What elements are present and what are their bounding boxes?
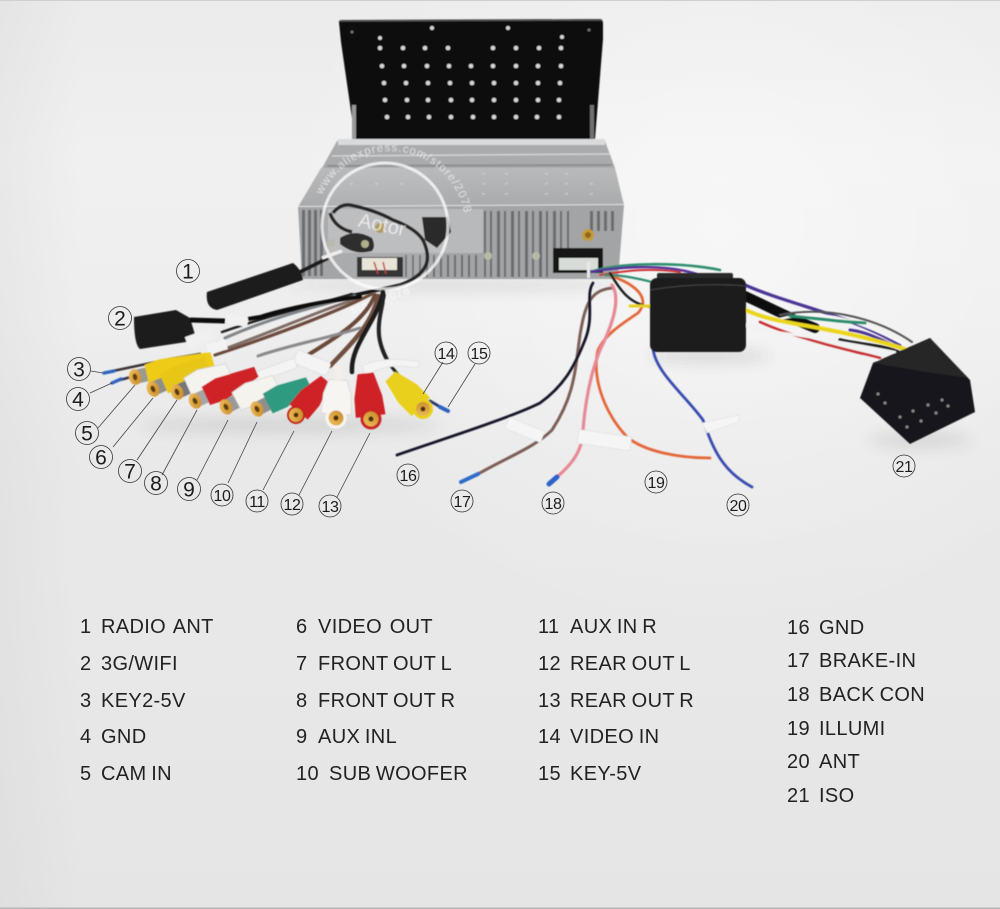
number 3: 3 [73,358,85,382]
photo: car stereo and harness [102,18,976,490]
RCA connector 10: green [246,372,314,422]
left harness wires [104,292,448,411]
number 6 [90,446,112,470]
callout leader lines [90,362,475,497]
legend item 12: 12 [538,653,561,675]
legend column 3 [538,616,694,785]
number 11: 11 [249,494,265,511]
legend item 6: 6 [296,616,307,638]
stereo chassis [298,139,624,297]
number 1: 1 [182,260,194,284]
legend item 1: RADIO ANT [101,616,214,638]
number 21: 21 [896,459,913,476]
legend item 10: 10 [296,763,319,785]
wire 20: antenna [653,348,752,487]
number 14: 14 [438,346,455,363]
RCA connector 7: white [167,358,233,405]
legend item 7: 7 [296,653,307,675]
number 15: 15 [470,346,488,363]
harness wires to ISO plug [745,285,912,360]
number 2 [108,306,132,330]
number 19 [645,471,667,493]
number 4 [66,388,90,412]
RCA connector 13: red [351,372,387,431]
legend item 21: ISO [819,785,855,807]
number 18 [542,492,564,514]
chassis roof [298,168,624,207]
legend column 2 [296,616,468,785]
legend item 19: ILLUMI [819,718,886,740]
legend item 15: 15 [538,763,561,785]
watermark: ring and store url: Aotor [356,210,408,241]
RCA connector 9: white [215,370,281,420]
number 5: 5 [81,422,93,446]
RCA connector 6: yellow [143,354,213,402]
legend item 17: 17 [787,650,810,672]
legend item 10: SUB WOOFER [329,763,468,785]
number 2: 2 [114,308,126,330]
number 11 [246,490,268,512]
RCA connector 11: red [281,372,335,430]
number 10: 10 [214,488,231,505]
legend item 6: VIDEO OUT [318,616,433,638]
number 12: 12 [284,497,301,514]
legend item 8: 8 [296,690,307,712]
legend item 17: BRAKE-IN [819,650,916,672]
number 5 [76,422,98,446]
legend column 4 [787,617,925,807]
number 15 [468,342,490,364]
number 17 [451,490,473,512]
legend item 9: AUX INL [318,726,397,748]
legend item 19: 19 [787,718,810,740]
number 18: 18 [544,496,562,513]
legend item 9: 9 [296,726,307,748]
legend item 3: 3 [80,690,91,712]
number 12 [281,493,303,515]
connector 2: 3G WiFi [134,310,266,354]
wire 18: reverse [549,285,632,484]
filter box [650,273,746,352]
legend item 4: GND [101,726,146,748]
chassis upper tier [322,141,615,168]
legend item 13: 13 [538,690,561,712]
legend item 21: 21 [787,785,810,807]
callout numbers [66,260,915,517]
number 8 [144,472,168,496]
legend item 16: GND [819,617,864,639]
number 13: 13 [322,499,339,516]
legend item 3: KEY2-5V [101,690,186,712]
legend item 8: FRONT OUT R [318,690,455,712]
number 10 [211,484,233,506]
legend item 14: VIDEO IN [570,726,659,748]
legend item 15: KEY-5V [570,763,642,785]
connector 21: ISO plug [860,338,975,444]
number 6: 6 [95,446,107,470]
watermark: ring and store url: store/2078 [350,284,412,317]
soft shadows under parts [140,280,970,448]
number 1 [176,260,200,284]
legend item 18: BACK CON [819,684,925,706]
number 8: 8 [150,472,162,496]
chassis rear panel [298,205,624,279]
number 17: 17 [454,494,471,511]
number 7 [118,460,142,484]
connector 1: radio antenna [207,251,360,316]
legend column 1 [80,616,214,785]
legend item 2: 2 [80,653,91,675]
legend item 16: 16 [787,617,810,639]
watermark: ring and store url: www.aliexpress.com/store/2078 [316,144,472,212]
watermark: ring and store url [316,144,472,317]
RCA connector 12: white [320,364,354,429]
legend item 2: 3G/WIFI [101,653,178,675]
legend item 12: REAR OUT L [570,653,691,675]
legend item 5: CAM IN [101,763,172,785]
RCA connector 14: yellow [381,367,439,425]
number 9: 9 [183,478,195,502]
legend item 5: 5 [80,763,91,785]
number 13 [319,495,341,517]
wire 17: brake [461,288,612,482]
number 14 [435,342,457,364]
number 16: 16 [400,468,417,485]
rear sockets [553,248,603,273]
legend item 7: FRONT OUT L [318,653,452,675]
knockout plate cables [333,205,427,297]
wire 16: GND [397,283,593,455]
white cable tags [255,350,420,382]
number 7: 7 [124,460,136,484]
number 16 [397,464,419,486]
number 21 [893,455,915,477]
legend item 20: ANT [819,751,860,773]
number 3 [68,358,90,382]
number 19: 19 [648,475,665,492]
legend item 14: 14 [538,726,561,748]
legend item 11: AUX IN R [570,616,657,638]
wires from socket to filter box [587,262,720,307]
number 20 [727,494,749,516]
heat sink fins [302,210,614,277]
RCA connector 8: red [184,361,262,414]
number 9 [178,478,200,502]
wire 19: illumination [596,274,710,458]
legend item 20: 20 [787,751,810,773]
number 4: 4 [72,388,84,412]
RCA connector 5: yellow [127,348,216,390]
number 20: 20 [730,498,747,515]
legend item 11: 11 [538,616,559,638]
screws [582,229,594,241]
top flap of the stereo [339,19,603,139]
legend item 18: 18 [787,684,810,706]
legend item 1: 1 [80,616,91,638]
legend item 13: REAR OUT R [570,690,694,712]
legend item 4: 4 [80,726,91,748]
